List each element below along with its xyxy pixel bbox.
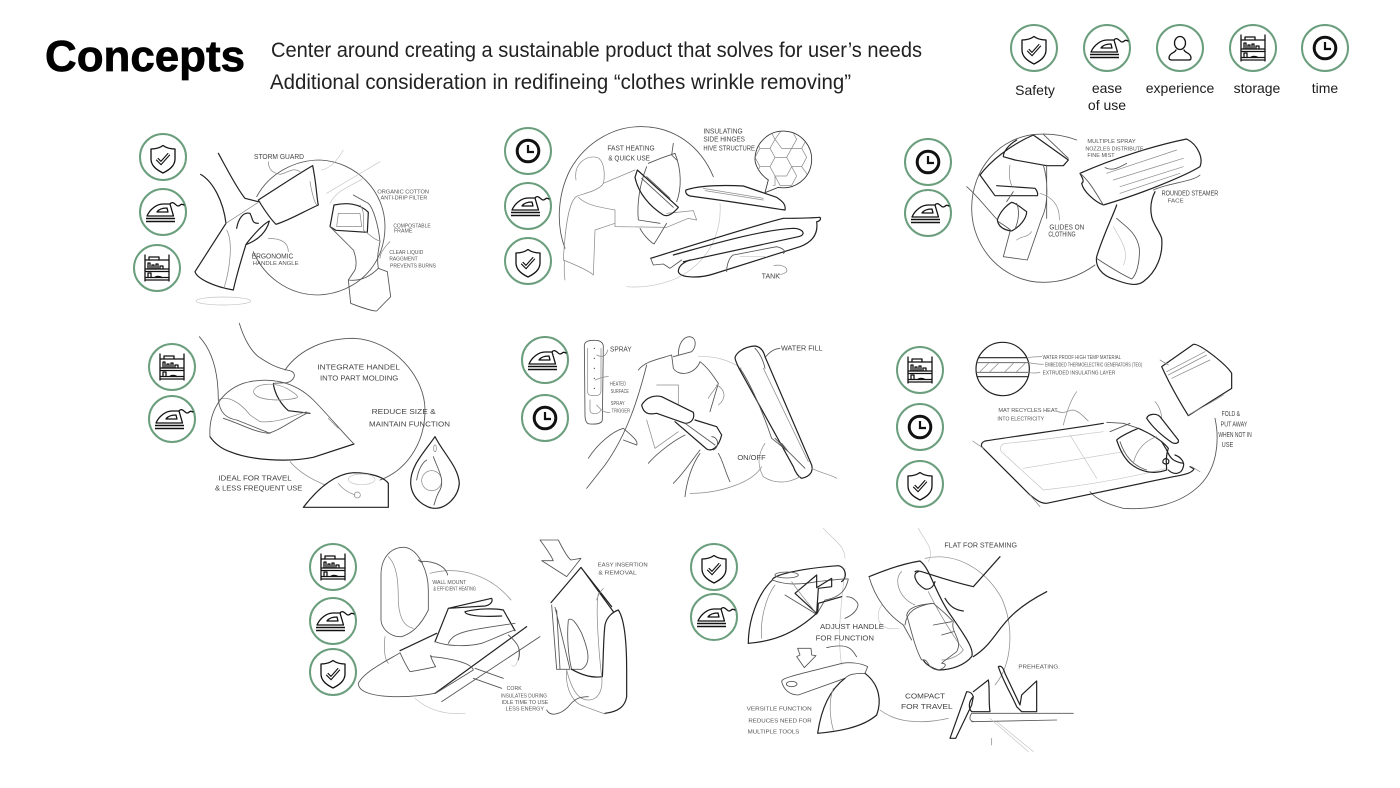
sketch 5: ON/OFF bbox=[737, 453, 766, 462]
sketch 4: INTO PART MOLDING bbox=[320, 374, 399, 383]
sketch 1: RAGGMENT bbox=[389, 257, 418, 263]
sketch 7: EASY INSERTION bbox=[598, 563, 648, 569]
sketch 1: ANTI-DRIP FILTER bbox=[381, 196, 427, 202]
concept 2: fast heating steamer with hive structure bbox=[505, 126, 820, 287]
sketch 8: PREHEATING. bbox=[1018, 664, 1060, 670]
legend: experience bbox=[1146, 25, 1214, 96]
concept 3: rounded steamer face with spray nozzles bbox=[905, 134, 1218, 284]
icons: safety, ease of use bbox=[691, 544, 737, 640]
legend: ease of use: of use bbox=[1088, 97, 1126, 113]
sketch 7: & EFFICIENT HEATING bbox=[433, 587, 476, 593]
sketch 7: WALL MOUNT bbox=[432, 580, 467, 586]
sketch 8 bbox=[747, 528, 1073, 752]
sketch 7: LESS ENERGY bbox=[506, 706, 544, 712]
sketch 1 bbox=[195, 150, 436, 311]
concept 1: handheld steamer with storm guard bbox=[134, 134, 436, 311]
icons: time, ease of use bbox=[905, 139, 951, 236]
sketch 6: EXTRUDED INSULATING LAYER bbox=[1043, 370, 1115, 376]
cross-section detail circle bbox=[973, 342, 1030, 396]
sketch 7: CORK bbox=[507, 686, 522, 692]
sketch 2: SIDE HINGES bbox=[703, 134, 745, 143]
legend: safety bbox=[1011, 25, 1057, 98]
sketch 6: USE bbox=[1222, 440, 1233, 449]
sketch 4: INTEGRATE HANDEL bbox=[317, 362, 400, 371]
legend: time bbox=[1302, 25, 1348, 96]
sketch 3: FINE MIST bbox=[1087, 153, 1115, 159]
sketch 1: STORM GUARD bbox=[254, 152, 304, 161]
sketch 6: EMBEDDED THERMOELECTRIC GENERATORS (TEG) bbox=[1045, 362, 1142, 368]
title: Concepts bbox=[45, 32, 245, 81]
sketch 5: WATER FILL bbox=[781, 343, 823, 352]
legend: time: time bbox=[1312, 80, 1338, 96]
sketch 5: SPRAY bbox=[611, 401, 625, 407]
sketch 8: COMPACT bbox=[905, 691, 946, 700]
sketch 3: FACE bbox=[1168, 198, 1184, 204]
sketch 5: SURFACE bbox=[611, 389, 629, 395]
legend: storage: storage bbox=[1234, 80, 1281, 96]
sketch 8: FOR TRAVEL bbox=[901, 702, 953, 711]
sketch 7: IDLE TIME TO USE bbox=[502, 700, 549, 706]
icons: time, ease of use, safety bbox=[505, 128, 551, 284]
legend: safety: Safety bbox=[1015, 82, 1055, 98]
concept 4: compact travel iron bbox=[149, 323, 459, 508]
sketch 2: INSULATING bbox=[703, 126, 743, 135]
icons: storage, ease of use, safety bbox=[310, 544, 356, 695]
sketch 7 bbox=[358, 540, 648, 714]
sketch 8: FLAT FOR STEAMING bbox=[944, 541, 1017, 550]
intro text bbox=[270, 39, 922, 94]
sketch 1: HANDLE ANGLE bbox=[253, 261, 299, 267]
intro text: Center around creating a sustainable product that solves for user’s needs bbox=[271, 39, 922, 62]
legend: ease of use: ease bbox=[1092, 80, 1122, 96]
legend: storage bbox=[1230, 25, 1281, 96]
sketch 2: HIVE STRUCTURE bbox=[703, 144, 755, 153]
sketch 4: REDUCE SIZE & bbox=[372, 407, 436, 416]
sketch 5: HEATED bbox=[610, 382, 626, 388]
sketch 2: TANK bbox=[762, 271, 780, 280]
icons: ease of use, time bbox=[522, 337, 568, 441]
legend: ease of use bbox=[1084, 25, 1130, 113]
icons: safety, ease of use, storage bbox=[134, 134, 186, 291]
sketch 3: NOZZLES DISTRIBUTE bbox=[1085, 146, 1144, 152]
sketch 6 bbox=[973, 342, 1252, 509]
concept 7: wall-mounted iron with cork insulation bbox=[310, 540, 648, 714]
sketch 3: CLOTHING bbox=[1048, 229, 1076, 238]
sketch 3: GLIDES ON bbox=[1049, 223, 1084, 232]
sketch 8: FOR FUNCTION bbox=[816, 633, 874, 642]
sketch 1: ORGANIC COTTON bbox=[377, 189, 429, 195]
sketch 6: WATER PROOF HIGH TEMP MATERIAL bbox=[1043, 355, 1121, 361]
sketch 5 bbox=[584, 337, 837, 497]
sketch 6: PUT AWAY bbox=[1221, 419, 1247, 428]
legend: experience: experience bbox=[1146, 80, 1214, 96]
sketch 1: ERGONOMIC bbox=[252, 251, 294, 260]
sketch 2 bbox=[559, 126, 820, 287]
intro text: Additional consideration in redifineing “clothes wrinkle removing” bbox=[270, 71, 851, 94]
sketch 8: VERSITLE FUNCTION bbox=[747, 706, 812, 712]
sketch 6: INTO ELECTRICITY bbox=[997, 417, 1044, 423]
sketch 2: & QUICK USE bbox=[608, 154, 650, 163]
concept 6: heat-recycling mat with folding iron bbox=[897, 342, 1252, 509]
icons: storage, time, safety bbox=[897, 347, 943, 507]
sketch 3: MULTIPLE SPRAY bbox=[1087, 139, 1136, 145]
sketch 1: PREVENTS BURNS bbox=[390, 264, 436, 270]
sketch 8: MULTIPLE TOOLS bbox=[748, 730, 800, 736]
sketch 7: INSULATES DURING bbox=[501, 694, 547, 700]
sketch 4: IDEAL FOR TRAVEL bbox=[218, 474, 292, 483]
concept 8: adjustable handle steamer bbox=[691, 528, 1073, 752]
concept 5: hanging garment spray steamer bbox=[522, 337, 837, 497]
sketch 6: FOLD & bbox=[1222, 409, 1240, 418]
sketch 7: & REMOVAL bbox=[598, 571, 637, 577]
sketch 3: ROUNDED STEAMER bbox=[1162, 189, 1218, 198]
legend bbox=[1011, 25, 1348, 113]
sketch 8: ADJUST HANDLE bbox=[820, 622, 884, 631]
sketch 3 bbox=[967, 134, 1218, 284]
sketch 1: FRAME bbox=[394, 229, 413, 235]
sketch 1: CLEAR LIQUID bbox=[389, 250, 423, 256]
sketch 5: SPRAY bbox=[610, 345, 632, 354]
sketch 1: COMPOSTABLE bbox=[393, 223, 431, 229]
sketch 2: FAST HEATING bbox=[607, 144, 655, 153]
sketch 6: WHEN NOT IN bbox=[1218, 430, 1252, 439]
sketch 4: MAINTAIN FUNCTION bbox=[369, 420, 450, 429]
sketch 4 bbox=[199, 323, 459, 508]
sketch 5: TRIGGER bbox=[612, 408, 630, 414]
icons: storage, ease of use bbox=[149, 344, 195, 442]
sketch 4: & LESS FREQUENT USE bbox=[215, 484, 302, 493]
sketch 8: REDUCES NEED FOR bbox=[748, 718, 812, 724]
sketch 6: MAT RECYCLES HEAT bbox=[998, 408, 1058, 414]
